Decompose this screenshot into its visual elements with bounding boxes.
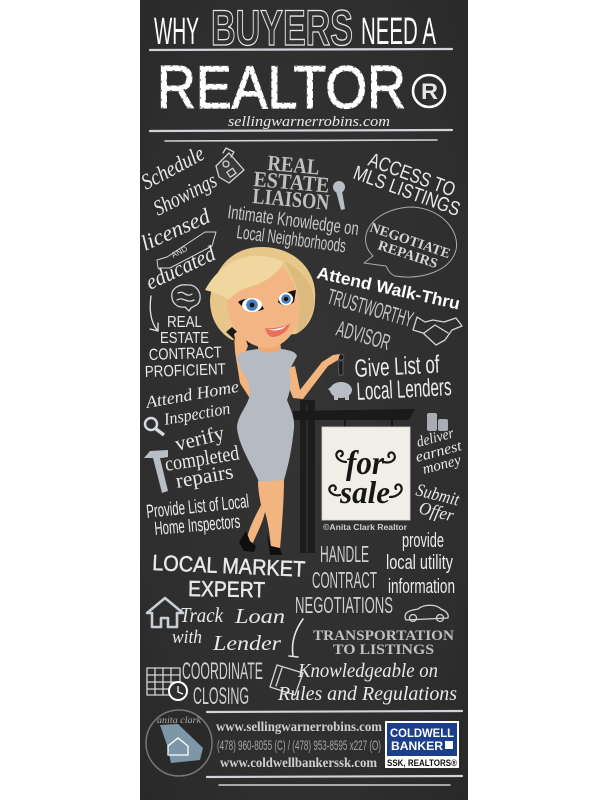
- contact details: (478) 960-8055 (C) / (478) 953-8595 x227 (O): [217, 737, 381, 753]
- schedule showings: [137, 140, 221, 220]
- coordinate closing: [182, 658, 263, 710]
- give list of local lenders: [354, 351, 452, 406]
- icon: car: [405, 605, 448, 622]
- access to mls listings: ACCESS TO: [365, 149, 458, 202]
- hair side strands: [285, 262, 314, 334]
- title: why buyers need a: WHY: [154, 11, 199, 53]
- provide local utility information: [386, 530, 455, 598]
- coordinate closing: CLOSING: [193, 683, 249, 710]
- access to mls listings: MLS LISTINGS: [350, 162, 463, 221]
- title: why buyers need a: NEED A: [361, 11, 436, 53]
- real estate contract proficient: ESTATE: [160, 330, 209, 347]
- access to mls listings: [350, 149, 463, 221]
- contact details: www.coldwellbankerssk.com: [220, 756, 377, 771]
- icon: handshake: [413, 317, 462, 345]
- icon: calendar: [147, 668, 180, 695]
- for sale sign board: [322, 427, 410, 520]
- character: realtor woman: [205, 247, 340, 555]
- transportation to listings: [313, 628, 454, 658]
- real estate liaison: LIAISON: [252, 183, 331, 215]
- knowledgeable on rules and regulations: [277, 660, 457, 705]
- deliver earnest money: [414, 426, 464, 478]
- icon: magnifier: [145, 418, 164, 435]
- negotiate repairs speech bubble: REPAIRS: [376, 239, 440, 272]
- knowledgeable on rules and regulations: Rules and Regulations: [277, 683, 457, 705]
- dress: [237, 349, 297, 482]
- hair back: [210, 247, 315, 340]
- logo: anita clark georgia seal: [146, 710, 212, 776]
- left arm: [234, 334, 255, 397]
- deliver earnest money: deliver: [415, 426, 456, 451]
- licensed and educated: AND: [170, 244, 189, 260]
- website url: sellingwarnerrobins.com: [228, 114, 390, 130]
- contact details: [216, 720, 382, 771]
- icon: keys in hand: [338, 354, 344, 375]
- for sale sign post: [293, 400, 415, 553]
- icon: house cards: [216, 148, 244, 183]
- right eye: [278, 290, 296, 306]
- track loan with lender: with: [172, 627, 202, 648]
- shoes: [239, 531, 282, 555]
- give list of local lenders: Local Lenders: [356, 373, 452, 406]
- icon: piggy bank: [328, 382, 352, 400]
- track loan with lender: [172, 603, 285, 655]
- icon: brain: [172, 285, 200, 311]
- copyright: ©Anita Clark Realtor: [323, 523, 407, 532]
- real estate liaison: ESTATE: [253, 166, 330, 198]
- handle contract negotiations: CONTRACT: [312, 567, 377, 593]
- left eye: [238, 298, 264, 312]
- chalkboard background: [140, 0, 468, 800]
- attend home inspection: Inspection: [161, 399, 232, 429]
- submit offer: Offer: [417, 497, 457, 526]
- track loan with lender: Loan: [234, 604, 285, 628]
- attend home inspection: [143, 377, 241, 429]
- track loan with lender: Track: [180, 603, 224, 627]
- intimate knowledge on local neighborhoods: [226, 202, 360, 257]
- local market expert: LOCAL MARKET: [152, 550, 306, 582]
- logo: anita clark georgia seal: anita clark: [157, 715, 202, 725]
- verify completed repairs: [163, 420, 241, 493]
- trustworthy advisor: TRUSTWORTHY: [325, 284, 416, 332]
- provide list of local home inspectors: Provide List of Local: [145, 491, 250, 523]
- provide local utility information: local utility: [386, 552, 453, 574]
- for sale sign board: sale: [339, 474, 390, 510]
- provide list of local home inspectors: Home Inspectors: [154, 512, 241, 540]
- deliver earnest money: earnest: [414, 438, 464, 466]
- licensed and educated: [137, 203, 220, 295]
- local market expert: EXPERT: [188, 576, 265, 602]
- icon: hammer: [144, 450, 168, 493]
- provide list of local home inspectors: [145, 491, 250, 540]
- give list of local lenders: Give List of: [354, 351, 440, 383]
- attend walk-thru: Attend Walk-Thru: [315, 263, 462, 314]
- verify completed repairs: repairs: [174, 459, 235, 493]
- submit offer: Submit: [414, 479, 462, 510]
- handle contract negotiations: [295, 541, 393, 618]
- attend home inspection: Attend Home: [143, 377, 241, 412]
- icon: rulebook: [270, 665, 303, 695]
- transportation to listings: TO LISTINGS: [333, 642, 434, 658]
- title: realtor: REALTOR: [157, 54, 406, 121]
- logo: coldwell banker: COLDWELL: [390, 726, 454, 740]
- title: realtor: R: [421, 79, 438, 104]
- real estate contract proficient: CONTRACT: [149, 344, 222, 364]
- arrow: [150, 296, 158, 331]
- real estate contract proficient: REAL: [167, 314, 202, 331]
- verify completed repairs: completed: [163, 440, 241, 476]
- track loan with lender: Lender: [212, 631, 282, 655]
- local market expert: [152, 550, 306, 602]
- schedule showings: Showings: [149, 167, 221, 220]
- logo: coldwell banker: SSK, REALTORS®: [387, 758, 457, 769]
- icon: clock: [169, 682, 187, 700]
- real estate liaison: [252, 150, 331, 215]
- verify completed repairs: verify: [172, 420, 227, 456]
- icon: coins: [427, 413, 448, 431]
- provide local utility information: information: [388, 576, 455, 598]
- title: realtor: REALTOR: [157, 54, 406, 121]
- hair bangs: [205, 256, 284, 300]
- negotiate repairs speech bubble: NEGOTIATE: [368, 221, 452, 262]
- mouth: [265, 324, 290, 337]
- handle contract negotiations: NEGOTIATIONS: [295, 592, 393, 618]
- licensed and educated: educated: [142, 240, 220, 295]
- logo: coldwell banker: [385, 721, 459, 769]
- real estate contract proficient: [145, 314, 226, 381]
- trustworthy advisor: ADVISOR: [334, 316, 393, 355]
- coordinate closing: COORDINATE: [182, 658, 263, 685]
- icon: house outline: [147, 598, 183, 627]
- logo: coldwell banker: BANKER: [391, 739, 443, 753]
- real estate contract proficient: PROFICIENT: [145, 361, 226, 381]
- provide local utility information: provide: [402, 530, 444, 552]
- icon: key: [333, 181, 345, 210]
- real estate liaison: REAL: [267, 150, 321, 180]
- phone and hand: [226, 327, 250, 353]
- neck: [258, 338, 281, 353]
- legs: [246, 479, 284, 549]
- right arm: [288, 354, 340, 399]
- contact details: www.sellingwarnerrobins.com: [216, 720, 382, 735]
- intimate knowledge on local neighborhoods: Intimate Knowledge on: [226, 202, 360, 240]
- arrow: [289, 619, 303, 657]
- deliver earnest money: money: [421, 452, 463, 478]
- handle contract negotiations: HANDLE: [320, 541, 369, 567]
- trustworthy advisor: [325, 284, 416, 355]
- intimate knowledge on local neighborhoods: Local Neighborhoods: [235, 222, 347, 257]
- face: [227, 267, 299, 348]
- negotiate repairs speech bubble: [364, 207, 457, 277]
- title: why buyers need a: BUYERS: [211, 0, 353, 56]
- for sale sign board: for: [346, 445, 385, 482]
- submit offer: [414, 479, 462, 526]
- transportation to listings: TRANSPORTATION: [313, 628, 454, 644]
- knowledgeable on rules and regulations: Knowledgeable on: [297, 660, 438, 682]
- schedule showings: Schedule: [137, 140, 209, 194]
- licensed and educated: licensed: [137, 203, 215, 256]
